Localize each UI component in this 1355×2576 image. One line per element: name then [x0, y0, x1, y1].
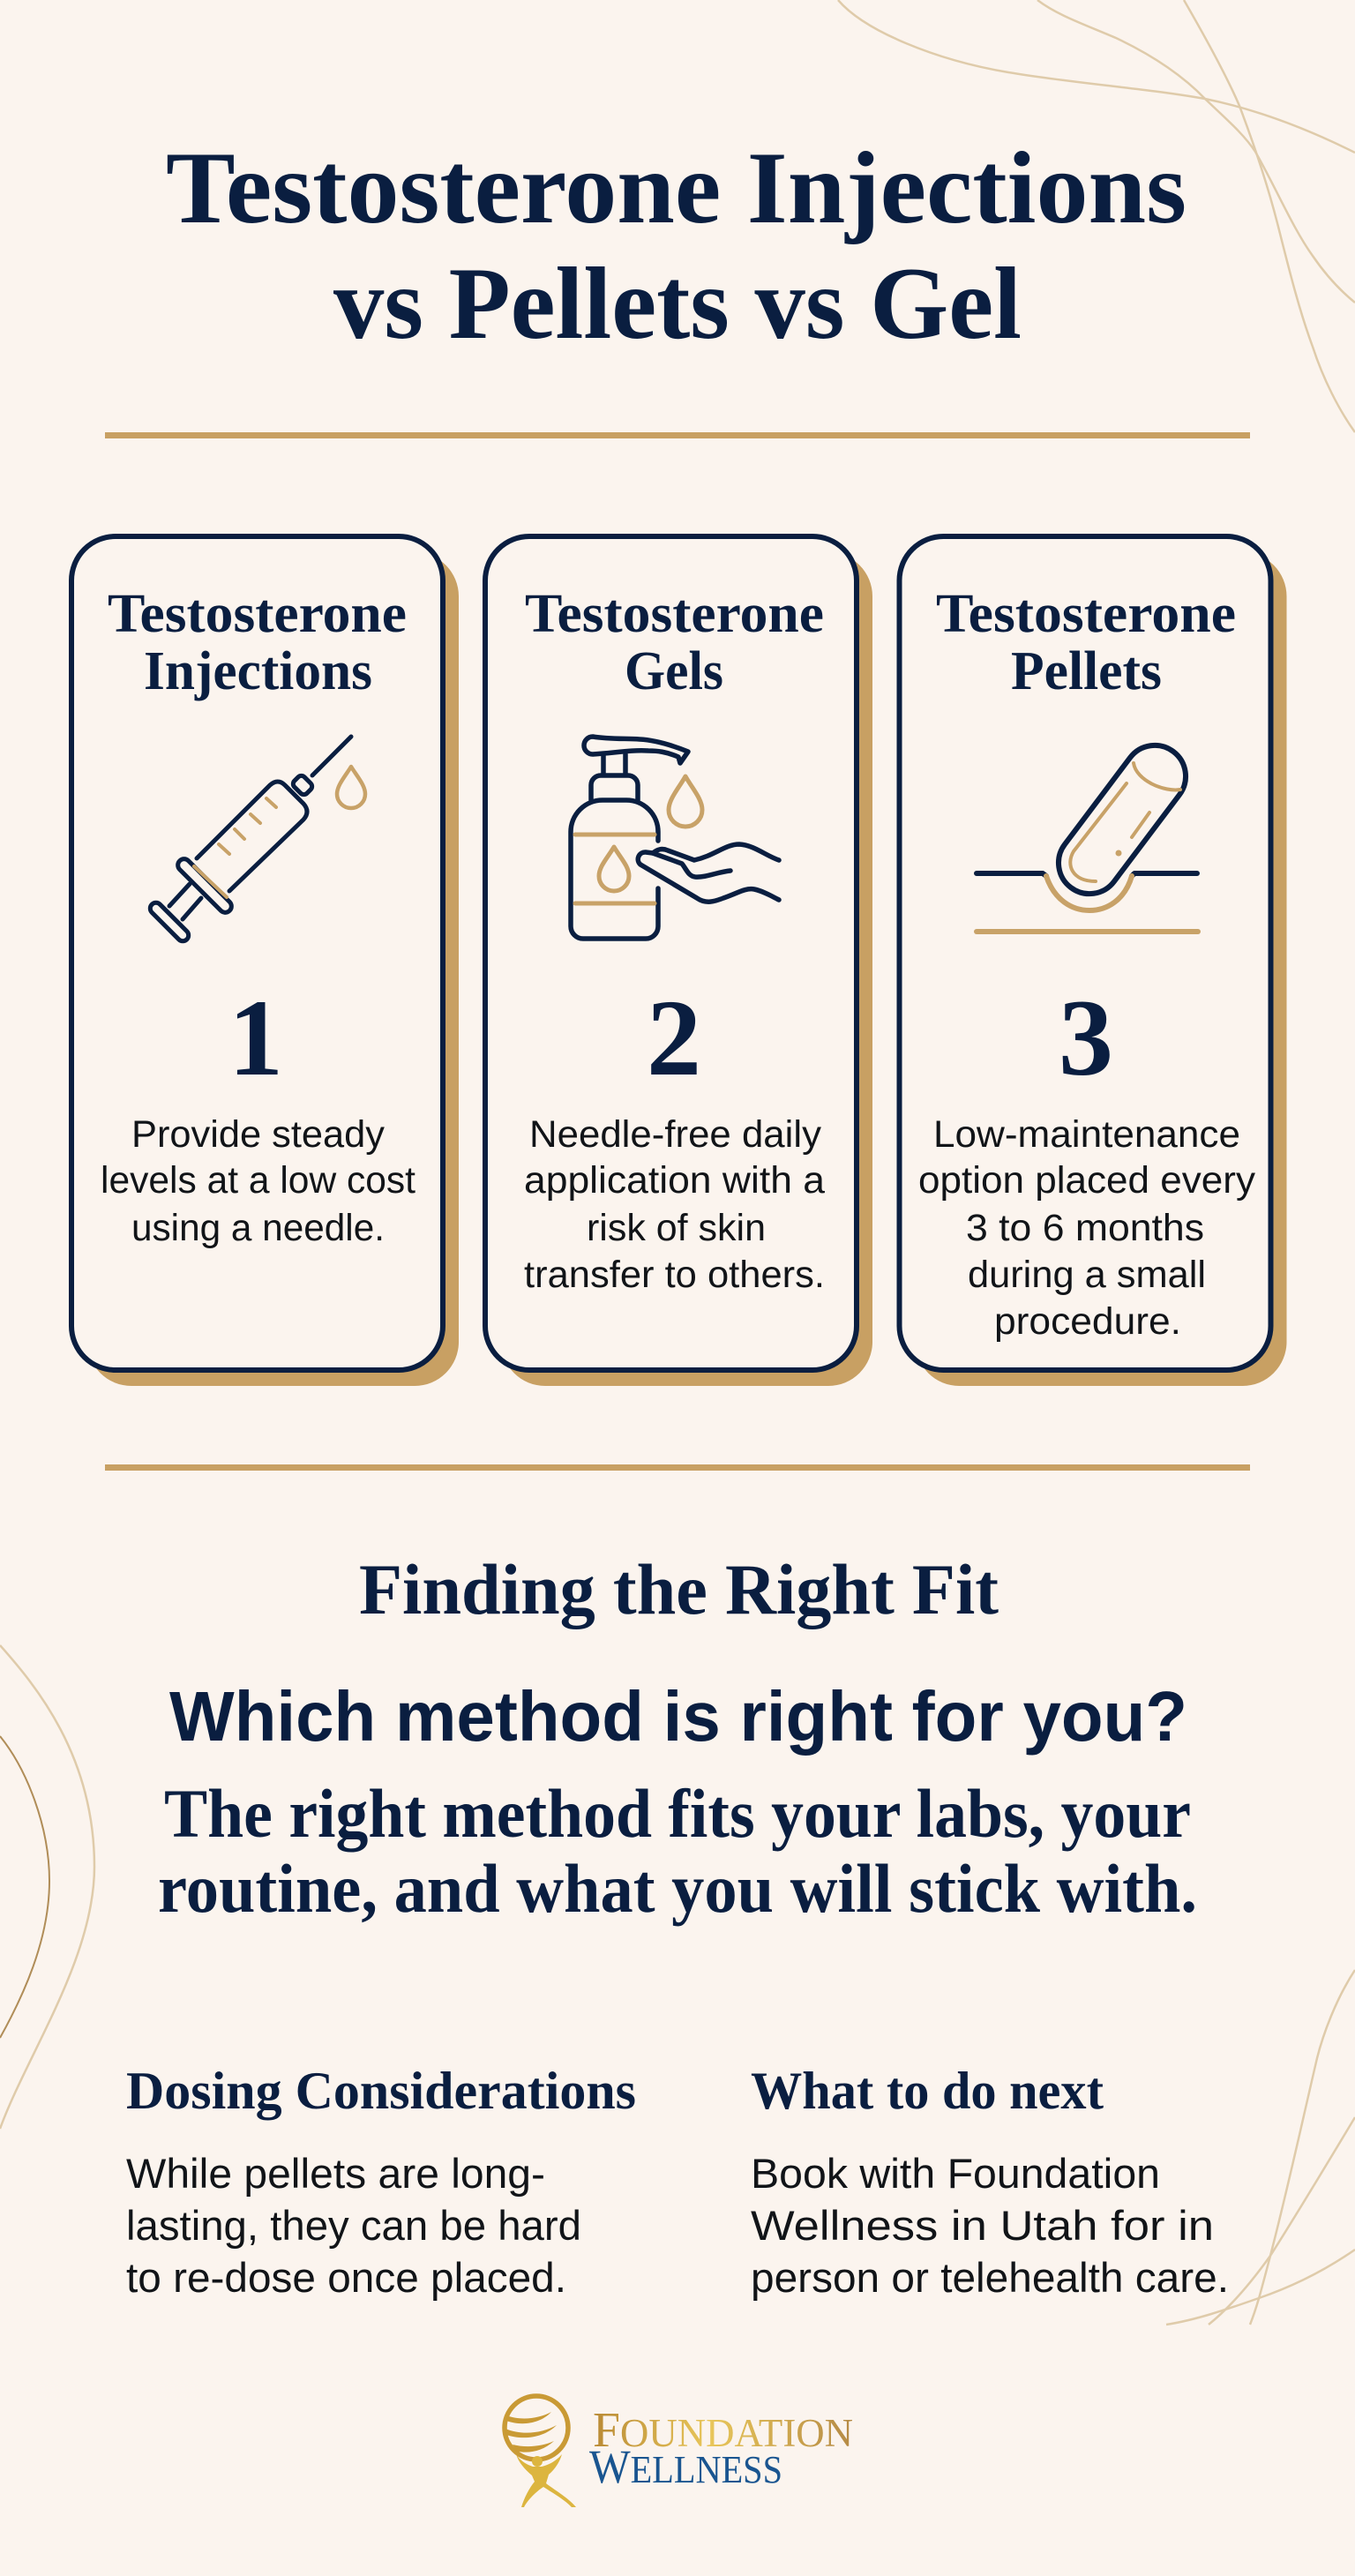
panel: testosterone pellets	[900, 536, 1286, 1386]
text: injections description: levels at a low cost	[101, 1159, 415, 1202]
panel: what to do next: Wellness in Utah for in	[751, 2202, 1214, 2249]
icon: figure holding globe	[505, 2396, 576, 2507]
title: vs Pellets vs Gel	[333, 247, 1022, 361]
heading: injections: Testosterone	[108, 584, 407, 644]
panel: dosing considerations: While pellets are long-	[126, 2150, 545, 2197]
text: pellets description	[918, 1113, 1256, 1343]
heading: gels: Testosterone	[525, 584, 824, 644]
panel: dosing considerations	[126, 2062, 636, 2301]
panel: dosing considerations: to re-dose once placed.	[126, 2254, 566, 2301]
text: injections description: using a needle.	[131, 1207, 385, 1249]
heading: injections: Injections	[144, 641, 372, 701]
icon: pellet under skin	[977, 733, 1198, 932]
text: gels description: application with a	[524, 1159, 825, 1202]
icon: gel pump and hand	[571, 737, 779, 939]
text: injections description	[101, 1113, 415, 1249]
heading: finding the right fit: Finding the Right Fit	[359, 1549, 999, 1629]
panel: what to do next: What to do next	[751, 2062, 1104, 2120]
number 2: 2	[647, 977, 701, 1098]
panel: what to do next: person or telehealth care.	[751, 2254, 1229, 2301]
text: pellets description: 3 to 6 months	[966, 1207, 1204, 1249]
text: right method statement	[158, 1775, 1197, 1927]
logo: foundation wellness: WELLNESS	[589, 2440, 782, 2493]
heading: pellets: Testosterone	[936, 584, 1236, 644]
text: pellets description: Low-maintenance	[933, 1113, 1240, 1156]
title: Testosterone Injections	[166, 131, 1187, 245]
number 3: 3	[1059, 977, 1113, 1098]
text: gels description: risk of skin	[587, 1207, 766, 1249]
panel: dosing considerations: Dosing Considerations	[126, 2062, 636, 2120]
text: right method statement: The right method fits your labs, your	[164, 1775, 1191, 1852]
heading: gels	[525, 584, 824, 701]
heading: pellets	[936, 584, 1236, 701]
text: pellets description: procedure.	[994, 1300, 1181, 1343]
heading: injections	[108, 584, 407, 701]
logo: foundation wellness: FOUNDATION	[593, 2403, 853, 2458]
icon: syringe	[148, 737, 365, 943]
title	[166, 131, 1187, 361]
text: gels description	[524, 1113, 825, 1296]
panel: testosterone gels	[485, 536, 872, 1386]
text: gels description: Needle-free daily	[529, 1113, 822, 1156]
text: pellets description: during a small	[968, 1254, 1206, 1296]
panel: what to do next: Book with Foundation	[751, 2150, 1160, 2197]
logo: foundation wellness	[505, 2396, 853, 2507]
heading: which method: Which method is right for you?	[169, 1677, 1187, 1756]
panel: dosing considerations: lasting, they can be hard	[126, 2202, 581, 2249]
heading: gels: Gels	[625, 641, 723, 701]
panel: what to do next	[751, 2062, 1229, 2301]
text: gels description: transfer to others.	[524, 1254, 825, 1296]
text: right method statement: routine, and what you will stick with.	[158, 1850, 1197, 1927]
panel: testosterone injections	[71, 536, 459, 1386]
number 1: 1	[228, 977, 283, 1098]
text: pellets description: option placed every	[918, 1159, 1256, 1202]
heading: pellets: Pellets	[1011, 641, 1162, 701]
text: injections description: Provide steady	[131, 1113, 386, 1156]
